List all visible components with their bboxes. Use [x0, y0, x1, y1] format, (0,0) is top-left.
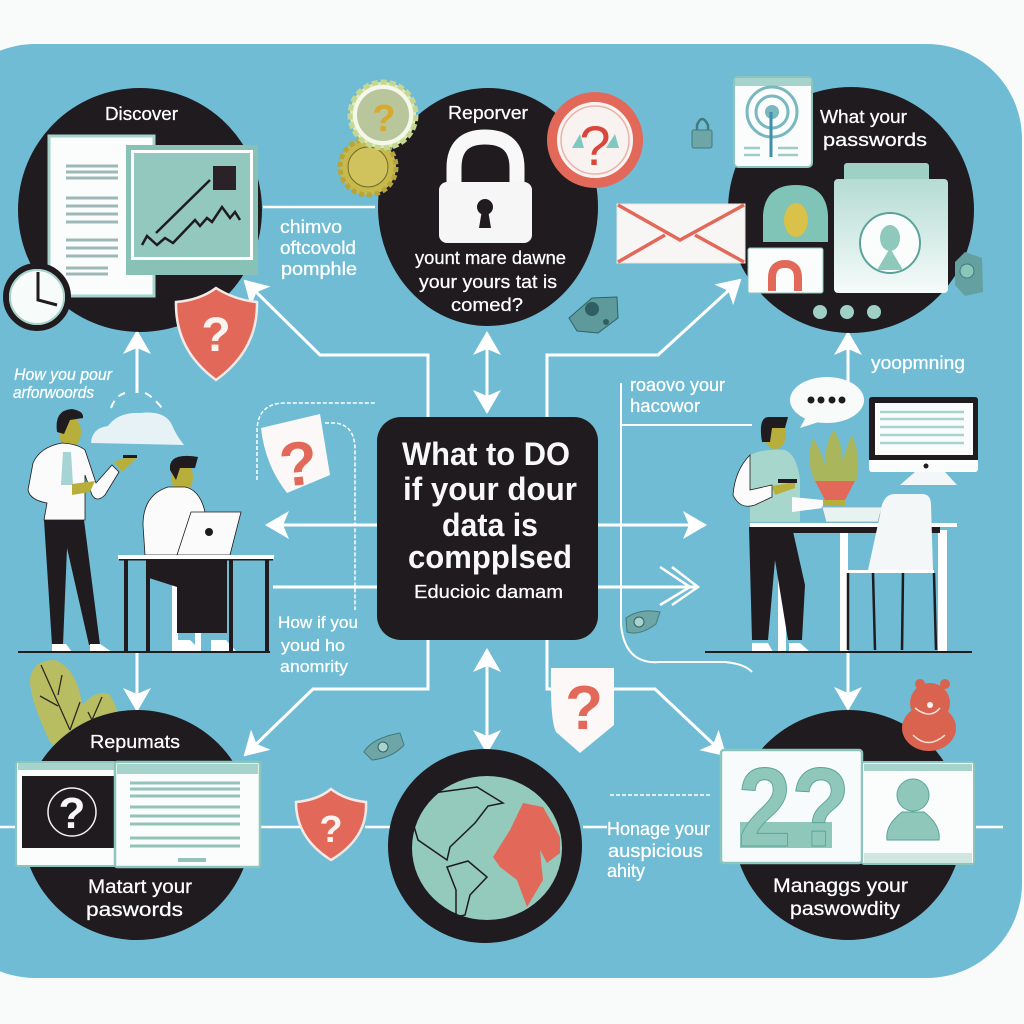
folder card [834, 163, 948, 293]
icon: small padlock [692, 119, 712, 148]
caption: yoopmning: yoopmning [871, 353, 965, 373]
caption: left people: How you pour [14, 365, 113, 384]
card: question window: ? [59, 789, 85, 838]
icon: leaf [30, 660, 119, 760]
icon: small car [569, 297, 618, 333]
icon: eye small [626, 611, 660, 633]
text block: your yours tat is [419, 272, 557, 292]
icon: red question circle: ? [579, 114, 611, 177]
person [733, 417, 845, 652]
plant [809, 430, 858, 500]
icon: clock [6, 266, 68, 328]
chart screen [126, 145, 258, 275]
illustration: two people at desk [18, 409, 274, 653]
speech bubble [790, 377, 864, 428]
title text: What to DO [402, 436, 570, 472]
seated man [143, 456, 237, 652]
desk top [750, 523, 957, 652]
icon: padlock [439, 137, 532, 243]
heading: reporver: Reporver [448, 103, 528, 123]
standing man [28, 409, 137, 652]
title text: if your dour [403, 471, 577, 507]
caption: how if you: How if you [278, 613, 358, 632]
icon: paper question 2: ? [565, 674, 603, 743]
heading: Repumats [90, 732, 180, 752]
icon: envelope [617, 204, 745, 263]
caption: Matart your [88, 877, 193, 898]
icon: shield bottom: ? [319, 809, 343, 851]
icon: eye [364, 733, 404, 760]
caption: honage: Honage your [607, 819, 710, 839]
icon: paper question 2 [551, 668, 614, 753]
circle panel: bottom left [16, 710, 260, 940]
circle panel: reporver [378, 88, 598, 326]
illustration: person at desk [705, 377, 978, 653]
caption: remove: hacowor [630, 396, 700, 416]
card: question window [16, 762, 116, 866]
icon: shield question: ? [201, 309, 231, 362]
icon: gears with question [340, 82, 416, 195]
card: 2?: 2? [738, 745, 850, 870]
icon: red question circle [552, 97, 638, 183]
title text: data is [442, 507, 538, 543]
caption: Managgs your [773, 876, 909, 897]
icon: paper question: ? [276, 428, 321, 501]
subtitle: Educioic damam [414, 582, 563, 602]
icon: gear right [955, 252, 983, 296]
caption: honage: ahity [607, 861, 645, 881]
small bug icons [813, 305, 881, 319]
icon: shield question [176, 288, 257, 380]
icon: red mascot [902, 679, 956, 751]
caption: honage: auspicious [608, 841, 703, 861]
icon: gears with question: ? [372, 98, 396, 140]
text block: yount mare dawne [415, 248, 566, 268]
signal card [734, 77, 812, 167]
circle: globe [388, 749, 582, 943]
circle panel: discover [18, 88, 262, 332]
circle panel: bottom right [721, 710, 974, 940]
heading: passwords: passwords [823, 130, 927, 150]
title text: compplsed [408, 539, 572, 575]
caption: how if you: youd ho [281, 636, 345, 655]
keyboard and chair [822, 494, 936, 650]
caption: paswords [86, 900, 183, 921]
caption: left people: arforwoords [13, 383, 94, 402]
caption: left top: pomphle [281, 259, 357, 279]
monitor [869, 397, 978, 485]
laptop [177, 512, 241, 555]
connector arrows [0, 207, 1003, 827]
caption: left top: chimvo [280, 217, 342, 237]
caption: paswowdity [790, 899, 901, 920]
caption: how if you: anomrity [280, 657, 349, 676]
desk [118, 555, 274, 652]
central panel: title [377, 417, 598, 640]
magnet card [748, 248, 823, 293]
text block: comed? [451, 295, 523, 315]
circle panel: passwords [728, 77, 974, 333]
heading: passwords: What your [820, 107, 907, 127]
icon: shield bottom [296, 789, 366, 860]
caption: remove: roaovo your [630, 375, 725, 395]
card: profile [862, 762, 974, 864]
icon: paper question [261, 414, 330, 501]
icon: cloud [91, 393, 184, 445]
document icon [49, 136, 154, 296]
small teal card [763, 185, 828, 242]
floor line [18, 651, 270, 653]
caption: left top: oftcovold [280, 238, 356, 258]
heading: discover: Discover [105, 104, 178, 124]
card: text window [115, 762, 260, 867]
floor line [705, 651, 972, 653]
